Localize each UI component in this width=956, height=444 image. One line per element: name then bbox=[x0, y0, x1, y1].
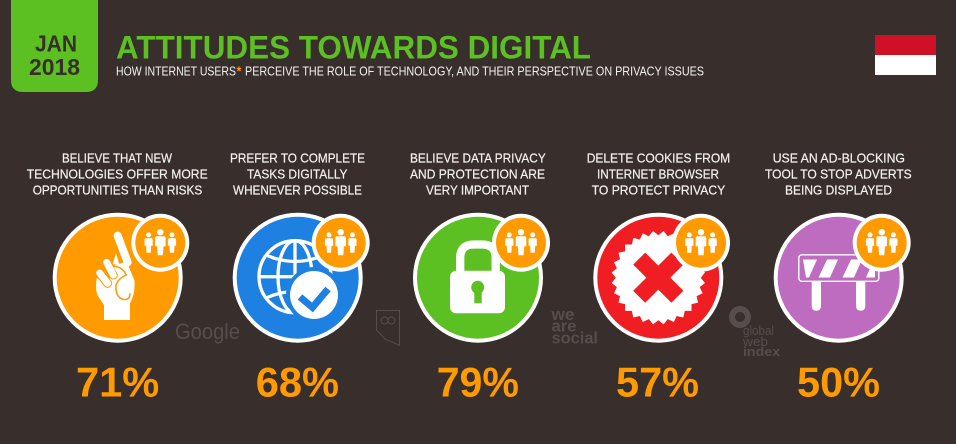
label: data privacy: BELIEVE DATA PRIVACY bbox=[410, 151, 546, 165]
icon: globe with check bbox=[235, 215, 361, 341]
value: 68%: 68% bbox=[256, 359, 339, 406]
value: 71%: 71% bbox=[76, 359, 159, 406]
subtitle bbox=[116, 64, 704, 78]
icon: road barrier bbox=[776, 215, 902, 341]
label: ad blocking: USE AN AD-BLOCKING bbox=[773, 151, 905, 165]
icon: padlock bbox=[415, 215, 541, 341]
label: complete tasks digitally bbox=[230, 151, 365, 197]
label: data privacy: AND PROTECTION ARE bbox=[410, 167, 545, 181]
label: new technologies: OPPORTUNITIES THAN RISKS bbox=[33, 183, 202, 197]
label: delete cookies bbox=[587, 151, 730, 197]
badge: internet users bbox=[853, 214, 911, 272]
badge: internet users bbox=[312, 214, 370, 272]
logo: GlobalWebIndex: index bbox=[743, 344, 781, 359]
logo: Hootsuite owl bbox=[376, 310, 400, 346]
value: 50%: 50% bbox=[797, 359, 880, 406]
date tab: JAN bbox=[35, 31, 77, 57]
label: new technologies bbox=[27, 151, 208, 197]
label: delete cookies: TO PROTECT PRIVACY bbox=[592, 183, 726, 197]
badge: internet users bbox=[131, 214, 189, 272]
icon: cookie with cross bbox=[595, 215, 721, 341]
label: new technologies: BELIEVE THAT NEW bbox=[62, 151, 172, 165]
label: ad blocking: BEING DISPLAYED bbox=[785, 183, 892, 197]
subtitle: PERCEIVE THE ROLE OF TECHNOLOGY, AND THEIR PERSPECTIVE ON PRIVACY ISSUES bbox=[245, 64, 704, 78]
date tab: 2018 bbox=[29, 54, 80, 80]
label: new technologies: TECHNOLOGIES OFFER MORE bbox=[27, 167, 208, 181]
logo: GlobalWebIndex bbox=[732, 309, 781, 359]
label: delete cookies: DELETE COOKIES FROM bbox=[587, 151, 730, 165]
badge: internet users bbox=[672, 214, 730, 272]
label: complete tasks digitally: PREFER TO COMPLETE bbox=[230, 151, 365, 165]
logo: We Are Social bbox=[550, 305, 598, 347]
subtitle: HOW INTERNET USERS bbox=[116, 64, 236, 78]
subtitle: * bbox=[236, 64, 242, 78]
flag: Indonesia bbox=[875, 35, 936, 75]
label: data privacy: VERY IMPORTANT bbox=[426, 183, 529, 197]
icon: crossed fingers bbox=[55, 215, 181, 341]
logo: We Are Social: are bbox=[552, 317, 576, 336]
label: ad blocking: TOOL TO STOP ADVERTS bbox=[765, 167, 912, 181]
label: delete cookies: INTERNET BROWSER bbox=[597, 167, 719, 181]
label: data privacy bbox=[410, 151, 546, 197]
label: ad blocking bbox=[765, 151, 912, 197]
label: complete tasks digitally: TASKS DIGITALLY bbox=[247, 167, 348, 181]
logo: Google: Google bbox=[175, 319, 240, 344]
value: 57%: 57% bbox=[616, 359, 699, 406]
title: ATTITUDES TOWARDS DIGITAL bbox=[116, 29, 591, 65]
logo: GlobalWebIndex: web bbox=[742, 334, 768, 349]
label: complete tasks digitally: WHENEVER POSSIBLE bbox=[233, 183, 362, 197]
logo: We Are Social: we bbox=[550, 305, 574, 324]
value: 79%: 79% bbox=[437, 359, 519, 406]
logo: GlobalWebIndex: global bbox=[743, 323, 774, 338]
date tab bbox=[11, 0, 98, 92]
logo: We Are Social: social bbox=[552, 328, 598, 347]
badge: internet users bbox=[492, 214, 550, 272]
